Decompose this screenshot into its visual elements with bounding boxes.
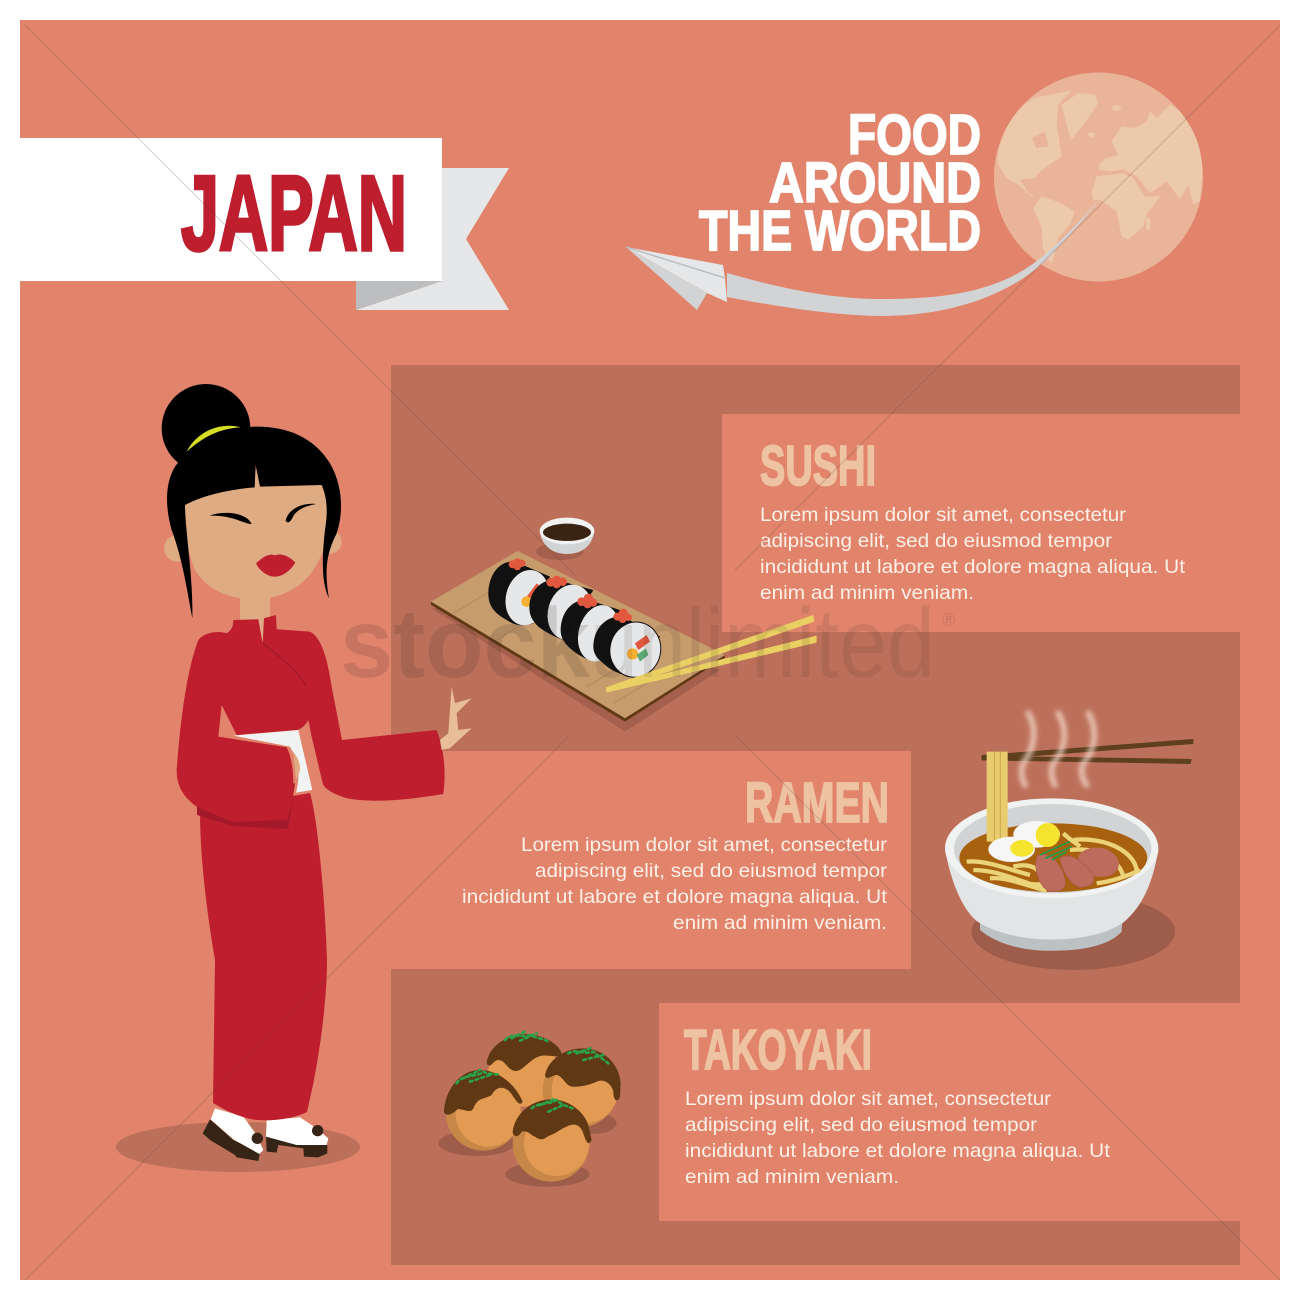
shadows [438,1131,515,1156]
text: takoyaki body: adipiscing elit, sed do eiusmod tempor [685,1114,1038,1136]
watermark: stock [340,588,590,698]
text: ramen body [462,834,888,934]
text: ramen body: incididunt ut labore et dolore magna aliqua. Ut [462,886,888,908]
title: Food around the world: AROUND [769,151,981,215]
broth [959,823,1147,892]
ground shadow [116,1122,360,1172]
hair tie [187,426,241,452]
text: sushi body: enim ad minim veniam. [760,582,974,604]
text: sushi body: Lorem ipsum dolor sit amet, consectetur [760,504,1127,526]
shoes [203,1108,328,1161]
right hand [440,687,472,750]
eyes [209,513,252,524]
skirt [200,793,327,1120]
eggs [1013,821,1060,848]
text: ramen body: adipiscing elit, sed do eiusmod tempor [535,860,888,882]
scallion [1040,842,1072,860]
heading: ramen: RAMEN [745,771,889,835]
bowl shadow [972,893,1175,970]
sushi roll 4 [593,617,666,682]
balls and sauce [488,1037,558,1107]
hair [167,427,341,618]
lips [256,554,295,577]
neck [240,593,270,623]
woman in kimono [116,384,472,1172]
torso and sleeves [177,615,445,822]
text: ramen body: enim ad minim veniam. [673,912,887,934]
sushi roll 1 [488,562,555,630]
watermark [340,588,955,698]
bowl foot [980,920,1122,951]
icon: globe [994,72,1203,282]
soy sauce bowl [536,543,584,560]
seaweed sprinkles [457,1031,610,1112]
steam [1022,713,1094,785]
text: sushi body: adipiscing elit, sed do eiusmod tempor [760,530,1113,552]
text: ramen body: Lorem ipsum dolor sit amet, consectetur [521,834,888,856]
text: sushi body [760,504,1186,604]
title: Food around the world [699,103,981,263]
heading: Japan: JAPAN [181,153,407,273]
panel: ramen text [391,751,911,969]
icon: paper plane with swoosh [626,198,1100,316]
hair bun [162,384,250,473]
ears [164,535,191,562]
text: sushi body: incididunt ut labore et dolore magna aliqua. Ut [760,556,1186,578]
sushi roll 2 [529,580,598,645]
sushi roll 3 [561,600,625,666]
text: takoyaki body: Lorem ipsum dolor sit amet, consectetur [685,1088,1052,1110]
sleeve trim [197,783,295,829]
text: takoyaki body [685,1088,1111,1188]
icon: takoyaki [438,1031,621,1187]
banner: Japan [20,138,509,310]
watermark: ® [942,610,955,630]
title: Food around the world: THE WORLD [699,199,981,263]
stepped dark content panel [391,365,1240,1265]
hand on waist [293,752,300,780]
noodles [967,833,1140,891]
chopsticks [606,615,814,693]
heading: takoyaki: TAKOYAKI [684,1018,872,1082]
noodles lifted [987,752,1008,842]
icon: ramen bowl [945,713,1193,970]
face [185,470,329,599]
icon: sushi on board [431,518,817,732]
pork slices [1078,848,1119,877]
bowl body [945,848,1158,940]
heading: sushi: SUSHI [760,434,876,498]
text: takoyaki body: enim ad minim veniam. [685,1166,899,1188]
panel: sushi text [722,414,1240,632]
title: Food around the world: FOOD [848,103,981,167]
chopsticks [982,739,1193,760]
panel: takoyaki text [659,1003,1240,1221]
roe toppings [509,558,632,623]
text: takoyaki body: incididunt ut labore et dolore magna aliqua. Ut [685,1140,1111,1162]
obi sash [233,730,312,793]
watermark: unlimited [590,588,935,698]
